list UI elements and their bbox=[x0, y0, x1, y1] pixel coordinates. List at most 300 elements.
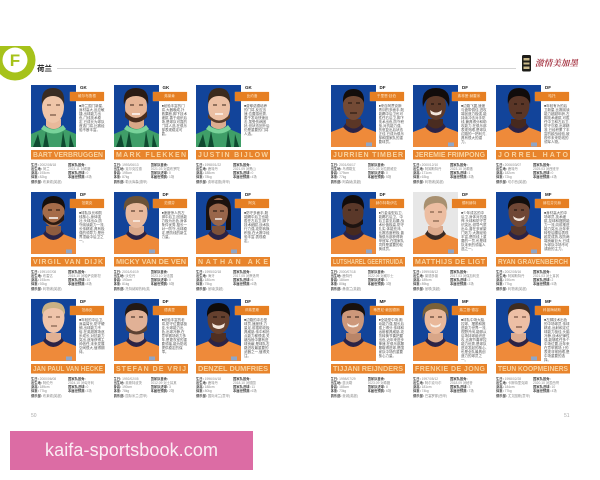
name banner: VIRGIL VAN DIJK bbox=[33, 259, 103, 266]
stats left: 生日: 2000/12/10 bbox=[413, 162, 438, 166]
name banner bbox=[196, 150, 270, 160]
stats left: 俱乐部: 尤文图斯(意甲) bbox=[496, 394, 530, 398]
stats left: 身高: 195cm bbox=[114, 171, 132, 175]
stats right: 2012.09 对土耳其 bbox=[150, 381, 177, 385]
role tag: 邓弗里斯 bbox=[245, 308, 259, 312]
stats left: 体重: 77kg bbox=[31, 389, 47, 393]
stats right: 国家队首秀: bbox=[68, 162, 86, 166]
stats right: 国家队进球: 0 bbox=[150, 278, 171, 282]
position: DF bbox=[162, 299, 168, 304]
player card: Stefan de Vrij bbox=[114, 299, 188, 398]
player card: Lutsharel Geertruida bbox=[330, 192, 404, 292]
stats left: 体重: 72kg bbox=[496, 175, 512, 179]
stats left: 生日: 1999/08/12 bbox=[413, 270, 438, 274]
stats left: 出生地: 布雷达 bbox=[31, 274, 53, 278]
name banner bbox=[496, 150, 570, 160]
stats right: 本届世预赛: 4场 bbox=[533, 389, 557, 393]
stats right: 2018.10 对德国 bbox=[233, 381, 256, 385]
stats left: 出生地: 奥斯特波茨 bbox=[114, 381, 142, 385]
stats right: 2023.11 对希腊 bbox=[68, 167, 90, 171]
stats left: 俱乐部: 布莱顿(英超) bbox=[31, 180, 62, 184]
biography: ■速度惊人的左脚中后卫,回追能力极为出色,身体条件优秀,擅长一对一防守,出球稳定,是防线的新生力量。 bbox=[162, 211, 187, 239]
stats left: 身高: 193cm bbox=[31, 278, 50, 282]
role tag: 德弗里 bbox=[164, 308, 175, 312]
stats left bbox=[413, 162, 449, 184]
icon: group F badge bbox=[0, 46, 36, 80]
role tag: 阿克 bbox=[248, 201, 256, 205]
stats right: 国家队首秀: bbox=[68, 270, 86, 274]
stats right: 国家队首秀: bbox=[233, 270, 251, 274]
stats right: 2021.03 对直布罗陀 bbox=[150, 167, 180, 171]
stats left: 身高: 184cm bbox=[330, 278, 349, 282]
player card: Jorrel Hato bbox=[496, 85, 570, 185]
stats left bbox=[31, 376, 62, 398]
biography: ■全能型中场,跑动能力强,擅长后插上得分,传球和远射都具威胁,攻防转换节奏把握出色,近年来进步神速,在俱乐部屡屡取得进球,是国家队中场的重要核心力量。 bbox=[378, 318, 404, 358]
stats left: 体重: 63kg bbox=[413, 175, 429, 179]
stats left bbox=[114, 270, 150, 291]
stats right: 国家队首秀: bbox=[150, 162, 168, 166]
biography: ■荷兰国门新星,身材高大,反应敏捷,出球能力出色,门线技术稳定,已成长为球队首选门将,比赛经验不断丰富。 bbox=[79, 104, 104, 132]
role tag: 弗林蓬·赫雷米 bbox=[458, 94, 480, 98]
stats right: 2021.09 对黑山 bbox=[233, 167, 256, 171]
role tag: 维尔布鲁根 bbox=[78, 94, 96, 98]
stats left bbox=[330, 376, 366, 398]
stats left: 身高: 184cm bbox=[496, 385, 515, 389]
player card: Ryan Gravenberch bbox=[496, 192, 570, 292]
stats left: 体重: 74kg bbox=[413, 389, 429, 393]
stats left: 体重: 80kg bbox=[330, 282, 346, 286]
position: DF bbox=[80, 299, 86, 304]
stats right bbox=[533, 376, 570, 394]
stats left: 俱乐部: 布莱顿(英超) bbox=[31, 394, 62, 398]
stats left: 俱乐部: 桑德兰(英超) bbox=[330, 287, 361, 291]
stats left: 生日: 1998/02/28 bbox=[496, 376, 521, 380]
role tag bbox=[535, 306, 569, 315]
stats left: 出生地: 鹿特丹 bbox=[196, 167, 218, 171]
stats left: 体重: 78kg bbox=[196, 175, 212, 179]
stats left: 生日: 1998/07/29 bbox=[330, 376, 356, 380]
role tag bbox=[535, 199, 569, 208]
biography: ■球队队长和防线核心,身体强壮,头球出众,防守阅读能力一流,长传精准,具有极强的领导力,是世界顶级中后卫之一。 bbox=[79, 211, 104, 243]
name banner: TIJJANI REIJNDERS bbox=[332, 366, 403, 373]
stats right bbox=[68, 376, 94, 393]
stats left: 生日: 1991/07/08 bbox=[31, 270, 56, 274]
stats right: 国家队进球: 0 bbox=[68, 171, 88, 175]
stats left bbox=[496, 162, 532, 184]
position: DF bbox=[380, 192, 386, 197]
stats right: 国家队首秀: bbox=[150, 376, 168, 380]
player card: Jeremie Frimpong bbox=[413, 85, 487, 185]
position: GK bbox=[80, 85, 87, 90]
stats left: 俱乐部: 利物浦(英超) bbox=[31, 287, 62, 291]
stats right: 国家队进球: 1 bbox=[450, 171, 470, 175]
stats left: 身高: 171cm bbox=[413, 171, 432, 175]
stats left: 身高: 189cm bbox=[413, 278, 432, 282]
name banner: MICKY VAN DE VEN bbox=[116, 259, 186, 266]
player card: Teun Koopmeiners bbox=[496, 299, 570, 399]
name banner: JURRIEN TIMBER bbox=[332, 152, 402, 159]
stats left: 出生地: 阿姆斯特丹 bbox=[496, 274, 524, 278]
stats left: 俱乐部: 曼城(英超) bbox=[330, 394, 358, 398]
stats left bbox=[413, 376, 449, 398]
stats right: 国家队首秀: bbox=[533, 376, 551, 380]
stats left: 生日: 2000/06/08 bbox=[31, 376, 56, 380]
biography: ■经验丰富的门将,大器晚成,扑救果断,脚下技术细腻,善于组织后场,是球队可靠的门将人选,在俱乐部表现稳定可靠。 bbox=[162, 104, 187, 136]
position: MF bbox=[380, 299, 386, 304]
stats left: 身高: 182cm bbox=[496, 171, 515, 175]
role tag bbox=[452, 92, 486, 101]
stats right bbox=[450, 162, 487, 180]
stats right bbox=[233, 162, 257, 179]
biography: ■边路飞翼,速度与盘带俱佳,进攻端创造力极强,能持续冲击对手防线,兼具得分和助攻能力,在俱乐部表现亮眼,是球队边路的一把利刃,具有很大的潜力。 bbox=[461, 104, 486, 144]
player card: Micky van de Ven bbox=[114, 192, 188, 291]
stats right: 国家队进球: 10 bbox=[68, 278, 90, 282]
stats left: 身高: 185cm bbox=[330, 385, 349, 389]
stats left bbox=[330, 270, 366, 291]
photo bbox=[196, 192, 241, 254]
stats left: 生日: 2001/04/19 bbox=[114, 270, 139, 274]
role tag: 赫尔特勒伊达 bbox=[376, 201, 397, 205]
stats left: 体重: 81kg bbox=[114, 282, 129, 286]
stats right: 国家队进球: 0 bbox=[533, 171, 553, 175]
role tag bbox=[70, 306, 104, 315]
stats left: 出生地: 卡斯特里克姆 bbox=[496, 381, 528, 385]
player card: Denzel Dumfries bbox=[196, 299, 270, 399]
stats left: 身高: 193cm bbox=[31, 171, 50, 175]
stats left: 出生地: 沃伦丹 bbox=[114, 274, 135, 278]
biography: ■身材高大的中场球员,技术细腻,控球和摆脱能力一流,向前推进能力突出,近年来转型后腰后表现越发成熟,攻防两端贡献巨大,已成为球队中场不可或缺的主力。 bbox=[544, 211, 569, 251]
biography: ■边路的冲击型球员,速度快,力量足,前插助攻极具威胁,传中和抢点能力都很强,关键战役中屡有进球贡献,是球队右路进攻最重要的武器之一,值得关注。 bbox=[244, 318, 269, 358]
photo bbox=[496, 85, 541, 147]
stats right: 2023.09 对希腊 bbox=[368, 381, 390, 385]
stats right: 2020.10 对墨西哥 bbox=[533, 381, 559, 385]
stats left: 俱乐部: 利物浦(英超) bbox=[413, 180, 444, 184]
role tag: 弗莱肯 bbox=[164, 94, 175, 98]
stats right: 国家队首秀: bbox=[68, 376, 86, 380]
stats left: 身高: 190cm bbox=[496, 278, 515, 282]
stats left: 生日: 2006/03/07 bbox=[496, 162, 521, 166]
stats right: 本届世预赛: 3场 bbox=[68, 389, 92, 393]
player card: Tijjani Reijnders bbox=[330, 299, 404, 399]
stats right: 本届世预赛: 3场 bbox=[368, 282, 391, 286]
stats left: 生日: 1995/02/18 bbox=[196, 270, 221, 274]
photo bbox=[413, 192, 458, 254]
name banner: STEFAN DE VRIJ bbox=[116, 366, 186, 373]
name banner: MARK FLEKKEN bbox=[116, 152, 186, 159]
role tag: 范赫克 bbox=[82, 308, 92, 312]
stats right bbox=[68, 162, 92, 179]
stats left bbox=[413, 270, 449, 291]
player card: Mark Flekken bbox=[114, 85, 188, 184]
role tag bbox=[152, 306, 186, 315]
stats right: 国家队进球: 2 bbox=[533, 278, 553, 282]
stats right: 国家队进球: 10 bbox=[533, 385, 555, 389]
stats left: 俱乐部: 切尔西(英超) bbox=[496, 180, 527, 184]
icon: group F badge: F bbox=[10, 51, 20, 70]
stats left: 俱乐部: 曼城(英超) bbox=[196, 287, 223, 291]
stats right: 2021.03 对拉脱维亚 bbox=[368, 167, 397, 171]
name banner: FRENKIE DE JONG bbox=[415, 366, 486, 373]
stats left bbox=[496, 376, 532, 398]
stats left: 体重: 77kg bbox=[496, 282, 512, 286]
name banner bbox=[413, 257, 487, 266]
stats right: 2024.10 对匈牙利 bbox=[68, 381, 94, 385]
stats right: 2021.03 对土耳其 bbox=[533, 274, 559, 278]
stats left: 体重: 78kg bbox=[114, 389, 129, 393]
stats right: 国家队进球: 1 bbox=[368, 278, 388, 282]
stats left: 身高: 193cm bbox=[114, 278, 132, 282]
stats right: 国家队首秀: bbox=[533, 270, 551, 274]
position: DF bbox=[245, 192, 251, 197]
stats right: 国家队首秀: bbox=[368, 270, 385, 274]
position: GK bbox=[162, 85, 169, 90]
stats left: 身高: 190cm bbox=[114, 385, 132, 389]
biography: ■左脚技术出色的中场球员,传球精准,远射和定位球能力极佳,头脑冷静,战术纪律性强,能够胜任多个中场位置,近年来在意甲赛场上的表现非常抢眼,是中场重要的选择。 bbox=[544, 318, 569, 362]
photo bbox=[31, 192, 76, 254]
photo bbox=[196, 299, 241, 361]
name banner bbox=[330, 364, 404, 374]
name banner bbox=[196, 257, 270, 266]
page number left: 50 bbox=[31, 413, 37, 419]
stats left bbox=[330, 162, 366, 184]
stats right: 本届世预赛: 8场 bbox=[68, 282, 92, 286]
stats left: 体重: 77kg bbox=[330, 175, 346, 179]
biography: ■来自阿贾克斯青训的多面手,既能踢中后卫也可胜任右后卫,脚下技术出色,防守积极,对抗能力强,伤愈复出后状态正佳,已成为俱乐部和国家队的重要球员。 bbox=[378, 104, 404, 144]
role tag bbox=[70, 199, 104, 208]
stats right bbox=[368, 376, 404, 394]
stats right: 国家队首秀: bbox=[450, 162, 468, 166]
stats left: 体重: 87kg bbox=[114, 175, 129, 179]
photo bbox=[330, 299, 376, 361]
name banner: TEUN KOOPMEINERS bbox=[498, 366, 568, 373]
position: DF bbox=[462, 85, 468, 90]
player card: Frenkie de Jong bbox=[413, 299, 487, 399]
player card: Justin Bijlow bbox=[196, 85, 270, 184]
stats left: 出生地: 海牙 bbox=[196, 274, 215, 278]
magazine brand text: 激情美加墨 bbox=[535, 57, 578, 69]
name banner: JEREMIE FRIMPONG bbox=[415, 152, 486, 159]
role tag bbox=[370, 92, 404, 101]
stats left: 生日: 1997/05/12 bbox=[413, 376, 438, 380]
heading: team name: 荷兰 bbox=[37, 64, 52, 73]
stats left bbox=[496, 270, 532, 291]
stats right bbox=[368, 270, 404, 287]
biography: ■年轻有为的后卫新星,比赛阅读能力超越年龄,左脚技术细腻,可胜任中卫和左后卫,防守沉稳,出球精准,已经积累了丰富的欧战经验,被视作未来防线的领军人物。 bbox=[544, 104, 569, 144]
stats right: 国家队进球: 3 bbox=[450, 385, 470, 389]
position: DF bbox=[80, 192, 86, 197]
stats left: 生日: 1993/06/13 bbox=[114, 162, 139, 166]
name banner: MATTHIJS DE LIGT bbox=[415, 259, 486, 266]
position: DF bbox=[545, 85, 551, 90]
stats right: 2022.06 对威尔士 bbox=[368, 274, 394, 278]
biography: ■经验丰富的老将,防守位置感极佳,头球能力出色,出球冷静,在意甲赛场效力多年,是更衣室的重要领袖,能为防线提供稳定的保障。 bbox=[162, 318, 187, 354]
photo bbox=[114, 299, 159, 361]
photo bbox=[114, 85, 159, 147]
stats left: 体重: 80kg bbox=[196, 389, 212, 393]
stats left: 生日: 1992/02/05 bbox=[114, 376, 139, 380]
stats left bbox=[196, 376, 232, 398]
name banner bbox=[196, 364, 270, 374]
role tag bbox=[235, 199, 269, 208]
stats left bbox=[114, 376, 150, 398]
stats left bbox=[31, 270, 62, 291]
biography: ■年轻的中后卫,身高臂长,防守硬朗,出球能力不俗,在英超赛场逐步成长,对抗能力突出,逐渐获得主帅信任,未来发展空间很大,值得期待。 bbox=[79, 318, 104, 354]
stats right: 国家队进球: 0 bbox=[150, 171, 171, 175]
name banner bbox=[114, 364, 188, 374]
stats left: 出生地: 鹿特丹 bbox=[330, 274, 352, 278]
stats right: 国家队进球: 6 bbox=[233, 278, 253, 282]
icon: magazine seal bbox=[522, 55, 531, 72]
biography: ■少年成名的中后卫,身体对抗强悍,头球和防守意识突出,领导气质出众,曾在多家豪门效力,大赛经验丰富,是防线上重要的一员,也是球队未来的领袖人选之一。 bbox=[461, 211, 486, 251]
photo bbox=[31, 299, 76, 361]
stats left: 生日: 1996/04/18 bbox=[196, 376, 221, 380]
role tag: 德利赫特 bbox=[462, 201, 476, 205]
stats right: 国家队进球: 0 bbox=[368, 171, 388, 175]
stats right: 2023.10 对希腊 bbox=[450, 167, 473, 171]
stats left: 体重: 77kg bbox=[496, 389, 512, 393]
biography: ■防守多面手,既能踢中后卫也能胜任左后卫,脚下技术细腻,战术执行力强,攻防转换积极,在大赛中经验丰富,表现稳定。 bbox=[244, 211, 269, 243]
stats right bbox=[368, 162, 404, 180]
photo bbox=[114, 192, 159, 254]
stats left: 身高: 180cm bbox=[196, 278, 215, 282]
stats right bbox=[233, 270, 259, 286]
role tag: 比约洛 bbox=[247, 94, 257, 98]
name banner: JUSTIN BIJLOW bbox=[198, 152, 268, 159]
stats left bbox=[114, 162, 148, 184]
stats left: 体重: 73kg bbox=[330, 389, 346, 393]
stats left: 俱乐部: 费耶诺德(荷甲) bbox=[196, 180, 230, 184]
name banner bbox=[330, 150, 404, 160]
stats left: 出生地: 莱德多普 bbox=[413, 274, 438, 278]
stats right bbox=[533, 270, 570, 287]
stats right: 国家队进球: 0 bbox=[233, 171, 253, 175]
stats right: 本届世预赛: 6场 bbox=[233, 282, 257, 286]
stats right: 国家队进球: 2 bbox=[450, 278, 470, 282]
role tag: 于里恩·廷伯 bbox=[377, 94, 396, 98]
stats left: 出生地: 克尔克拉德 bbox=[114, 167, 142, 171]
position: DF bbox=[162, 192, 168, 197]
stats left: 身高: 181cm bbox=[413, 385, 432, 389]
stats left: 俱乐部: 勒沃库森(德甲) bbox=[114, 180, 147, 184]
position: MF bbox=[462, 299, 468, 304]
stats right: 2023.10 对法国 bbox=[150, 274, 173, 278]
stats right: 国家队首秀: bbox=[368, 376, 385, 380]
stats left: 出生地: 兹沃勒 bbox=[330, 381, 352, 385]
role tag bbox=[152, 199, 186, 208]
stats left: 出生地: 鹿特丹 bbox=[196, 381, 218, 385]
stats right: 国家队进球: 11 bbox=[233, 385, 255, 389]
role tag bbox=[370, 306, 404, 315]
role tag bbox=[452, 306, 486, 315]
stats right bbox=[150, 270, 174, 286]
player card: Matthijs de Ligt bbox=[413, 192, 487, 292]
stats right: 国家队进球: 8 bbox=[368, 385, 388, 389]
stats left: 体重: 82kg bbox=[31, 175, 47, 179]
stats right: 本届世预赛: 6场 bbox=[368, 389, 391, 393]
biography: ■球队中场大脑,控球、摆脱和推进能力世界一流,视野开阔,能够从后场持球组织进攻,比赛节奏掌控能力优秀,是球队进攻发起的核心,也是全队最具创造力的球员之一。 bbox=[461, 318, 486, 362]
player card: Virgil van Dijk bbox=[31, 192, 105, 291]
stats left: 俱乐部: 曼联(英超) bbox=[413, 287, 440, 291]
biography: ■万金油型后卫,能踢右后卫、中后卫甚至后腰,战术价值极高,防守扎实,体能充沛,比赛态度积极,曾随俱乐部获得荷甲冠军,在国家队同样是重要的轮换成员。 bbox=[378, 211, 404, 251]
name banner bbox=[114, 150, 188, 160]
stats right bbox=[68, 270, 101, 286]
stats left: 生日: 2002/08/18 bbox=[31, 162, 56, 166]
stats right bbox=[150, 376, 188, 394]
stats left: 身高: 188cm bbox=[196, 385, 215, 389]
stats left: 生日: 1998/01/22 bbox=[196, 162, 221, 166]
stats left: 俱乐部: 国际米兰(意甲) bbox=[196, 394, 230, 398]
photo bbox=[496, 299, 541, 361]
stats right: 国家队首秀: bbox=[233, 376, 251, 380]
player card: Bart Verbruggen bbox=[31, 85, 105, 184]
page number right: 51 bbox=[564, 413, 570, 419]
stats right: 本届世预赛: 8场 bbox=[68, 175, 92, 179]
stats left: 出生地: 鹿特丹 bbox=[496, 167, 518, 171]
photo bbox=[330, 85, 376, 147]
stats right: 国家队首秀: bbox=[368, 162, 385, 166]
stats left: 俱乐部: 利物浦(英超) bbox=[496, 287, 527, 291]
header rule bbox=[57, 68, 516, 69]
stats right: 本届世预赛: 5场 bbox=[150, 282, 174, 286]
role tag bbox=[535, 92, 569, 101]
stats left: 生日: 2002/05/16 bbox=[496, 270, 521, 274]
biography: ■费耶诺德培养的门将,反应迅速,位置感优秀,善于发动快速反击,虽受伤病困扰,但状态回升后仍是重要的门将人选。 bbox=[244, 104, 269, 136]
stats left: 出生地: 阿伦丹 bbox=[31, 381, 53, 385]
role tag bbox=[235, 306, 269, 315]
stats left: 身高: 189cm bbox=[31, 385, 50, 389]
stats right: 2015.10 对哈萨克斯坦 bbox=[68, 274, 101, 278]
stats right: 国家队进球: 0 bbox=[68, 385, 88, 389]
photo bbox=[330, 192, 376, 254]
stats left: 出生地: 乌得勒支 bbox=[330, 167, 356, 171]
stats right: 国家队首秀: bbox=[450, 376, 468, 380]
stats right: 国家队首秀: bbox=[450, 270, 468, 274]
photo bbox=[413, 299, 458, 361]
stats left: 俱乐部: 巴塞罗那(西甲) bbox=[413, 394, 447, 398]
role tag: 范德芬 bbox=[164, 201, 175, 205]
stats right: 本届世预赛: 6场 bbox=[233, 389, 257, 393]
role tag: 科普梅纳斯 bbox=[543, 308, 561, 312]
position: DF bbox=[380, 85, 386, 90]
stats left: 体重: 75kg bbox=[196, 282, 212, 286]
stats left: 俱乐部: 国际米兰(意甲) bbox=[114, 394, 147, 398]
name banner: BART VERBRUGGEN bbox=[33, 152, 103, 159]
stats left: 出生地: 阿姆斯特丹 bbox=[413, 167, 441, 171]
stats left: 出生地: 阿尔克马尔 bbox=[413, 381, 441, 385]
player card: Jurrien Timber bbox=[330, 85, 404, 185]
stats left: 身高: 179cm bbox=[330, 171, 349, 175]
stats right: 2017.05 对摩洛哥 bbox=[233, 274, 259, 278]
stats right: 2018.09 对秘鲁 bbox=[450, 381, 473, 385]
stats left bbox=[31, 162, 62, 184]
stats left: 体重: 92kg bbox=[31, 282, 47, 286]
role tag: 赫拉芬贝赫 bbox=[543, 201, 561, 205]
stats left bbox=[196, 270, 224, 291]
name banner: NATHAN AKE bbox=[198, 259, 268, 266]
stats right bbox=[233, 376, 270, 394]
stats left bbox=[196, 162, 230, 184]
stats right: 本届世预赛: 3场 bbox=[450, 282, 474, 286]
role tag: 蒂贾尼·赖因德斯 bbox=[373, 308, 400, 312]
position: MF bbox=[545, 192, 552, 197]
stats right: 本届世预赛: 7场 bbox=[450, 389, 474, 393]
stats right: 本届世预赛: 5场 bbox=[368, 175, 391, 179]
watermark banner bbox=[10, 431, 253, 470]
photo bbox=[196, 85, 241, 147]
photo bbox=[413, 85, 458, 147]
watermark banner: kaifa-sportsbook.com bbox=[45, 440, 218, 460]
stats right: 本届世预赛: 1场 bbox=[150, 175, 174, 179]
